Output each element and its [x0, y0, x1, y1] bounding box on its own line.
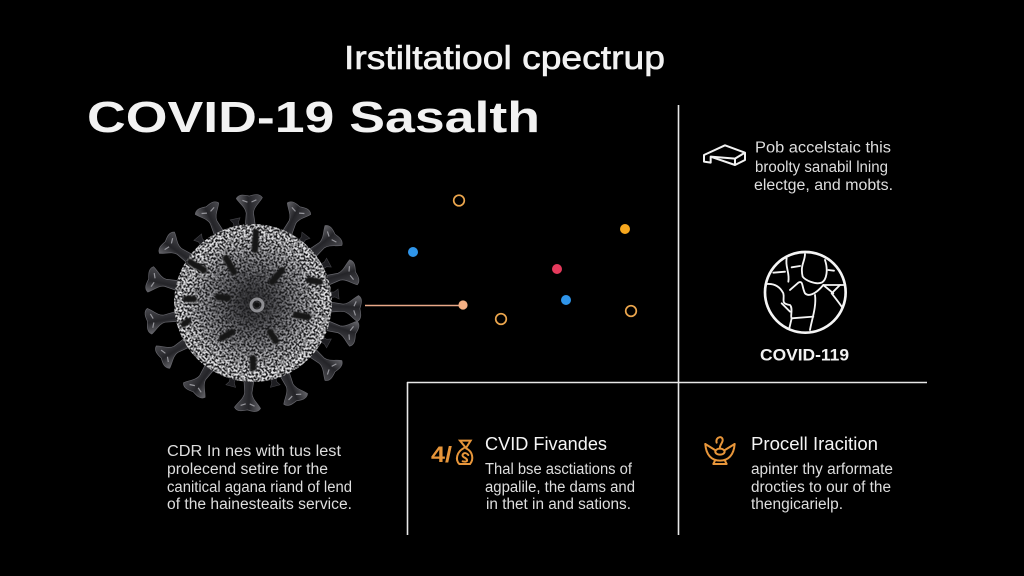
text block	[485, 461, 635, 513]
text block: virus description	[167, 443, 352, 513]
icon: lamp	[705, 437, 735, 464]
panel: process	[705, 433, 893, 513]
text block: top right: broolty sanabil lning	[755, 159, 888, 176]
text block: virus description: CDR In nes with tus lest	[167, 443, 342, 460]
text block: top right: electge, and mobts.	[754, 177, 893, 194]
text block: apinter thy arformate	[751, 461, 893, 478]
heading: CVID Fivandes	[485, 433, 607, 454]
panel: finances	[431, 433, 635, 513]
text block: drocties to our of the	[751, 479, 891, 496]
text block: Thal bse asctiations of	[485, 461, 633, 478]
text block: virus description: canitical agana riand of lend	[167, 479, 352, 496]
heading: Procell Iracition	[751, 433, 878, 454]
text block: top right: Pob accelstaic this	[755, 140, 891, 156]
globe label: COVID-119	[760, 346, 849, 364]
connector line	[365, 300, 468, 310]
title: Irstiltatiool cpectrup	[344, 39, 665, 76]
panel grid lines	[407, 105, 927, 535]
text block: agpalile, the dams and	[485, 479, 635, 496]
icon: graduation cap	[704, 145, 745, 165]
text block: in thet in and sations.	[486, 496, 631, 513]
icon: money bag: 4/	[431, 442, 452, 467]
text block: thengicarielp.	[751, 496, 843, 513]
virus illustration	[144, 194, 362, 412]
main heading: COVID-19 Sasalth	[87, 93, 540, 142]
panel: globe	[760, 252, 849, 364]
icon: cracked globe	[765, 252, 846, 333]
data dots	[408, 195, 636, 324]
text block: top right	[754, 140, 893, 194]
text block: virus description: prolecend setire for the	[167, 461, 328, 478]
icon: money bag	[431, 441, 472, 467]
text block	[751, 461, 893, 513]
text block: virus description: of the hainesteaits service.	[167, 496, 352, 513]
panel: top right	[704, 140, 893, 194]
